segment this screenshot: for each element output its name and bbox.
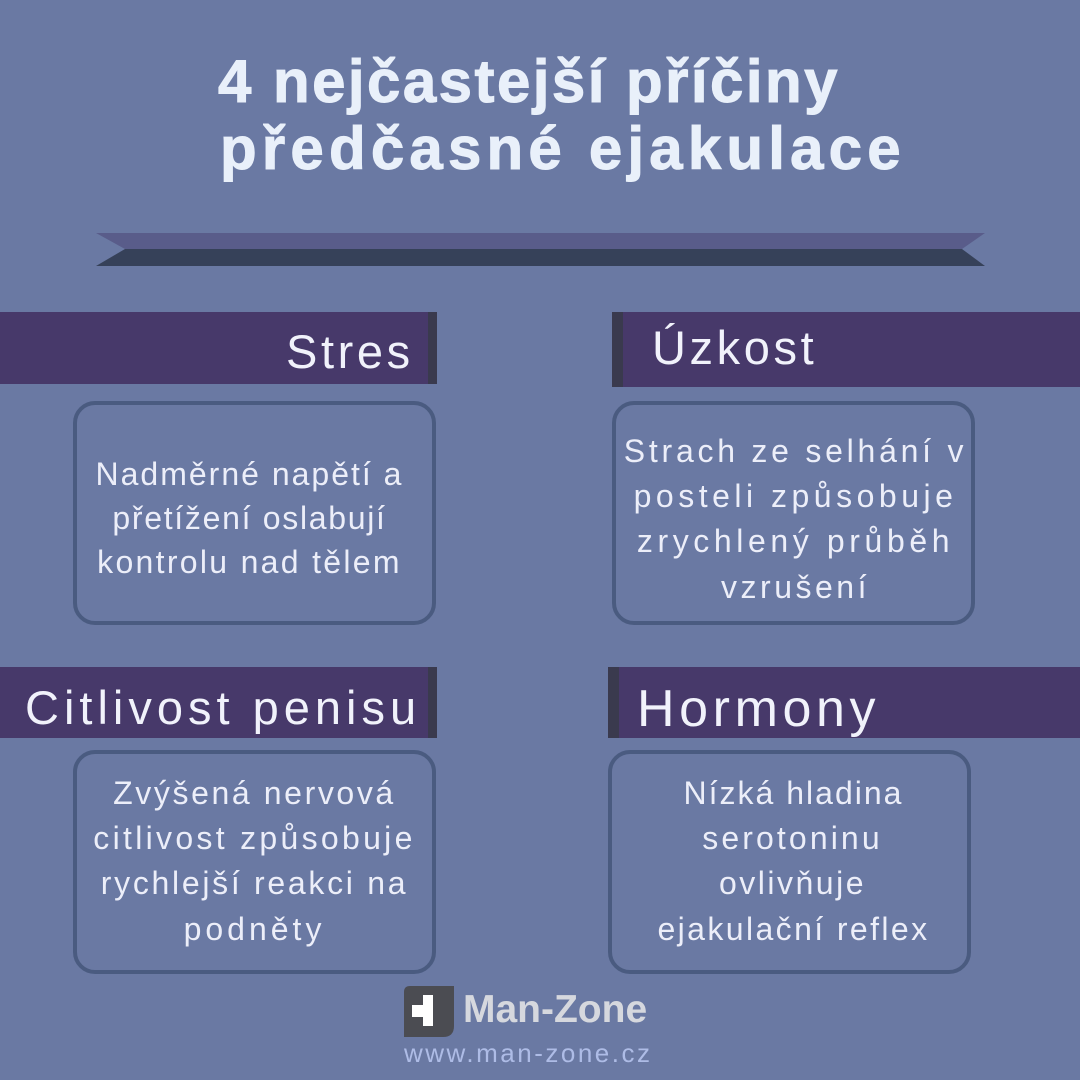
panel: hormony text: ovlivňuje bbox=[719, 865, 866, 901]
title bbox=[218, 48, 906, 182]
panel: úzkost text: posteli způsobuje bbox=[634, 478, 957, 514]
panel: úzkost text: Strach ze selhání v bbox=[624, 433, 967, 469]
panel: citlivost penisu heading: Citlivost penisu bbox=[25, 681, 421, 734]
panel: stres heading bbox=[0, 312, 437, 384]
panel: hormony text: ejakulační reflex bbox=[657, 911, 930, 947]
ribbon divider bbox=[96, 233, 985, 266]
panel: úzkost text: vzrušení bbox=[721, 569, 870, 605]
panel: citlivost text: rychlejší reakci na bbox=[101, 865, 408, 901]
panel: úzkost heading: Úzkost bbox=[652, 321, 817, 374]
panel: stres text: kontrolu nad tělem bbox=[97, 544, 402, 580]
website url: www.man-zone.cz bbox=[404, 1038, 652, 1068]
logo bbox=[404, 986, 647, 1037]
panel: hormony text bbox=[608, 750, 971, 974]
panel: hormony text: Nízká hladina bbox=[684, 775, 903, 811]
panel: stres text: Nadměrné napětí a bbox=[96, 456, 403, 492]
logo wordmark: Man-Zone bbox=[463, 988, 647, 1031]
panel: hormony heading bbox=[608, 667, 1080, 738]
title: 4 nejčastejší příčiny bbox=[218, 48, 840, 115]
panel: citlivost text: Zvýšená nervová bbox=[113, 775, 396, 811]
panel: citlivost text: citlivost způsobuje bbox=[93, 820, 416, 856]
panel: hormony text: serotoninu bbox=[702, 820, 883, 856]
panel: stres text bbox=[73, 401, 436, 625]
panel: citlivost penisu heading bbox=[0, 667, 437, 738]
icon: logo mark bbox=[404, 986, 454, 1037]
panel: citlivost text: podněty bbox=[184, 911, 325, 947]
panel: citlivost text bbox=[73, 750, 436, 974]
panel: úzkost text bbox=[612, 401, 975, 625]
title: předčasné ejakulace bbox=[220, 115, 906, 182]
panel: úzkost text: zrychlený průběh bbox=[637, 523, 954, 559]
panel: hormony heading: Hormony bbox=[637, 680, 880, 738]
panel: stres heading: Stres bbox=[286, 325, 414, 378]
panel: stres text: přetížení oslabují bbox=[112, 500, 387, 536]
panel: úzkost heading bbox=[612, 312, 1080, 387]
